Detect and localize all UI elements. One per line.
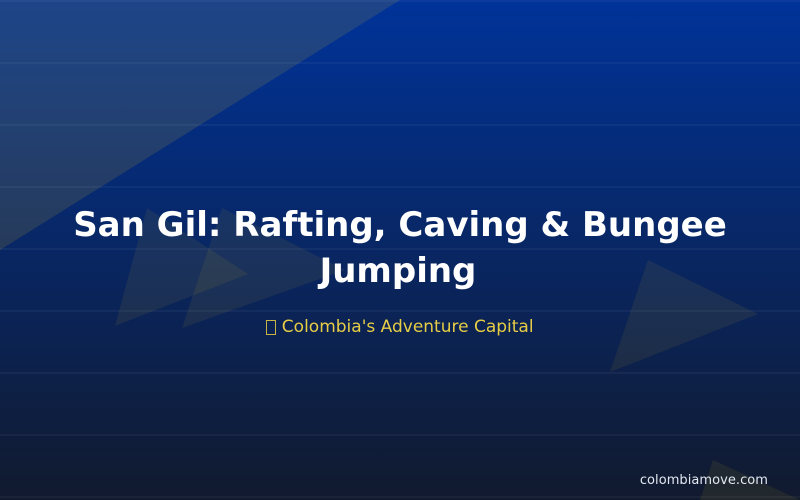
triangle: bottom right [700,460,800,500]
triangle: top left [0,0,400,250]
brand label: colombiamove.com [640,473,768,488]
subtitle: Colombia's Adventure Capital [282,317,534,337]
triangle: left [115,208,248,326]
triangle: centre left [182,208,345,328]
title: San Gil: Rafting, Caving & Bungee Jumping [73,205,727,291]
triangle: right [610,260,758,372]
